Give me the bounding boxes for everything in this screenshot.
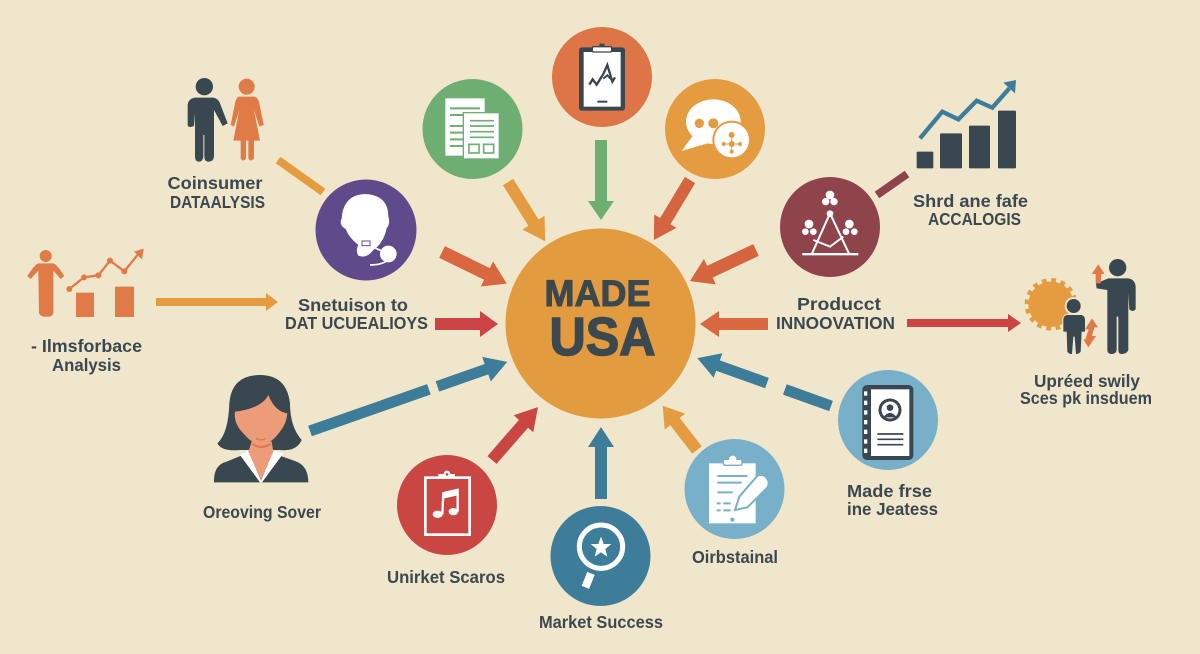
label: performance analysis: Analysis (52, 355, 121, 375)
connector: consumers to purple node (278, 160, 323, 192)
label: performance analysis: - Ilmsforbace (31, 336, 142, 356)
arrow: innovation to hub (700, 311, 768, 337)
label: upgraded (1020, 371, 1152, 408)
label: shared and safe (913, 191, 1028, 229)
label: sustainable: Oirbstainal (692, 547, 778, 567)
label: product innovation: INNOOVATION (776, 313, 895, 333)
central hub: MADE USA: USA (550, 307, 656, 367)
arrow: maroon node to hub (684, 237, 762, 294)
icon: rising bar chart (917, 80, 1016, 168)
arrow: book node to hub (dashed) (693, 346, 835, 418)
label: consumer data analysis: DATAALYSIS (170, 192, 265, 212)
arrow: innovation to upgraded (907, 314, 1021, 332)
icon: man and woman (188, 78, 264, 162)
arrow: red node to hub (482, 399, 548, 469)
central hub: MADE USA (506, 228, 696, 418)
icon: person with chart (27, 249, 144, 317)
label: center left: Snetuison to (298, 295, 408, 315)
arrow: woman to hub (dashed) (306, 350, 512, 443)
label: made free: Made frse (847, 481, 932, 501)
label: shared and safe: Shrd ane fafe (913, 191, 1028, 211)
label: made free: ine Jeatess (847, 499, 938, 519)
label: made free (847, 481, 938, 519)
label: upgraded: Upréed swily (1034, 371, 1140, 391)
label: consumer data analysis: Coinsumer (168, 173, 263, 193)
label: product innovation: Producct (797, 294, 881, 314)
icon: woman portrait (214, 375, 308, 482)
node: purple head icon (316, 180, 416, 280)
label: center left (285, 295, 428, 333)
node: music clipboard (397, 455, 497, 555)
label: market success: Market Success (539, 612, 663, 632)
arrow: top clipboard to hub (588, 140, 614, 220)
arrow: documents to hub (497, 175, 556, 248)
connector: maroon node to bar chart (877, 174, 907, 195)
central hub: MADE USA: MADE (544, 272, 650, 314)
node: maroon hierarchy (780, 177, 880, 277)
label: market scores: Unirket Scaros (387, 567, 505, 587)
node: magnifier with star (550, 506, 650, 606)
node: chat bubbles (665, 79, 765, 179)
icon: gear with people (1027, 259, 1136, 354)
label: ordering sover: Oreoving Sover (203, 502, 321, 522)
arrow: performance analysis to label (156, 293, 278, 311)
arrow: chat to hub (643, 173, 701, 247)
label: shared and safe: ACCALOGIS (928, 209, 1021, 229)
label: performance analysis (31, 336, 142, 375)
label: consumer data analysis (168, 173, 265, 212)
arrow: purple node to hub (436, 239, 513, 296)
node: book profile (838, 370, 938, 470)
label: upgraded: Sces pk insduem (1020, 388, 1152, 408)
node: documents (422, 79, 522, 179)
label: center left: DAT UCUEALIOYS (285, 313, 428, 333)
arrow: label to hub (435, 311, 498, 337)
node: clipboard with chart (552, 27, 652, 127)
label: product innovation (776, 294, 895, 333)
node: clipboard and pencil (684, 439, 784, 539)
arrow: magnifier node to hub (588, 427, 614, 499)
arrow: pencil node to hub (652, 398, 707, 458)
